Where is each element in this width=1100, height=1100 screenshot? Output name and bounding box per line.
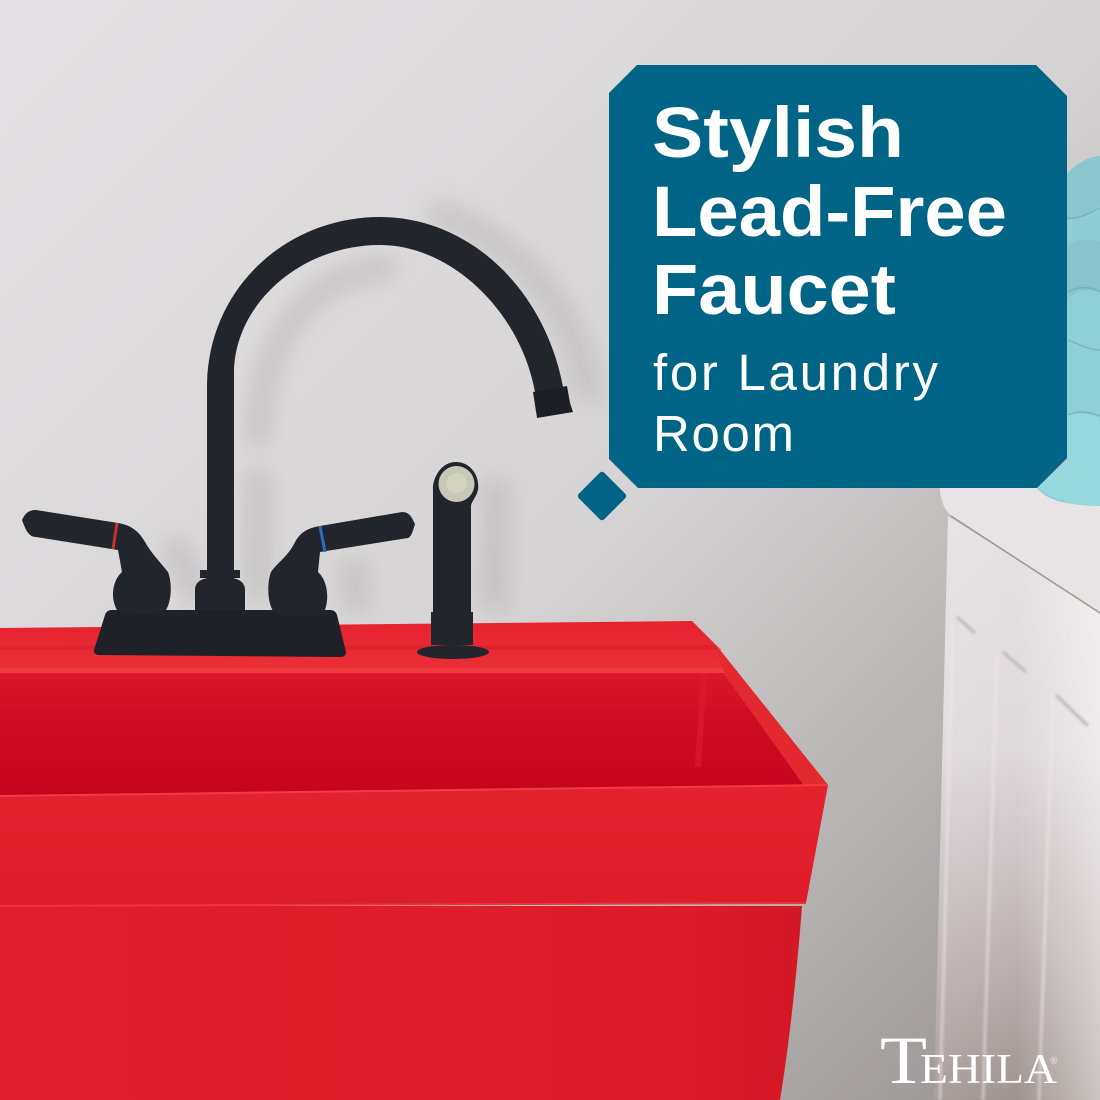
right handle [268, 512, 415, 616]
callout heading: Faucet [652, 250, 896, 330]
white cabinet [934, 488, 1100, 1100]
left handle [22, 510, 171, 614]
sink front rim [0, 785, 828, 906]
brand logo: EHILA [920, 1047, 1058, 1093]
faucet spout [207, 217, 563, 580]
callout subheading: Room [653, 405, 794, 462]
sink ledge [0, 621, 828, 787]
callout subheading: for Laundry [653, 344, 938, 401]
black faucet [22, 217, 573, 659]
blue towels [1037, 156, 1100, 506]
brand logo: ® [1050, 1056, 1058, 1067]
callout: heading panel [577, 65, 1067, 521]
callout heading: Stylish [652, 93, 904, 173]
sink basin interior [0, 672, 805, 796]
callout heading [652, 93, 1007, 330]
brand logo [880, 1022, 1058, 1098]
faucet wall shadows [172, 212, 590, 610]
faucet aerator [533, 386, 573, 418]
faucet stem collar [195, 570, 245, 616]
side sprayer [417, 462, 489, 659]
callout subheading [653, 344, 938, 462]
callout pointer diamond [577, 471, 627, 521]
brand logo: T [880, 1022, 927, 1098]
sink lower body [0, 906, 802, 1100]
faucet base plate [94, 610, 346, 657]
red sink [0, 621, 828, 1100]
callout heading: Lead-Free [652, 172, 1007, 252]
